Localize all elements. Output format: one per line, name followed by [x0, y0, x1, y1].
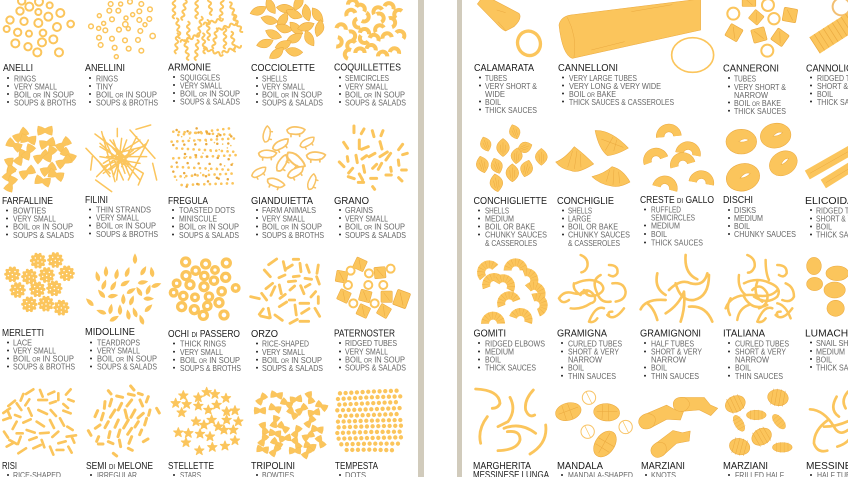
details: cannelloni: THICK SAUCES & CASSEROLES: [569, 98, 674, 107]
details: cocciolette: BOIL OR IN SOUP: [262, 91, 322, 100]
heading: conchiglie: CONCHIGLIE: [557, 196, 614, 207]
panel: gramignoni: [640, 255, 712, 381]
details: merletti: VERY SMALL: [13, 347, 56, 356]
heading: cannelloni: CANNELLONI: [558, 63, 618, 74]
details: coquillettes: VERY SMALL: [345, 82, 388, 92]
heading: midolline: MIDOLLINE: [85, 327, 135, 338]
details: coquillettes: [340, 74, 406, 108]
details: armonie: VERY SMALL: [180, 82, 222, 90]
details: grano: [340, 206, 406, 240]
heading: tempesta: TEMPESTA: [335, 461, 378, 472]
details: coquillettes: BOIL OR IN SOUP: [345, 91, 405, 100]
illustration: lumache snail shells: [807, 257, 848, 316]
heading: farfalline: FARFALLINE: [2, 196, 53, 207]
details: fregula: SOUPS & SALADS: [179, 231, 239, 240]
details: calamarata: WIDE: [485, 90, 505, 99]
details: fregula: BOIL OR IN SOUP: [179, 223, 239, 232]
details: conchiglie: LARGE: [568, 215, 591, 224]
panel: risi: [2, 389, 76, 477]
details: italiana: CURLED TUBES: [735, 340, 789, 348]
heading: creste di gallo: CRESTE DI GALLO: [640, 195, 714, 206]
panel: filini: [85, 125, 158, 239]
illustration: gianduietta farm animals: [250, 126, 325, 192]
details: fregula: TOASTED DOTS: [179, 206, 235, 215]
heading: mandala: MANDALA: [557, 461, 603, 472]
panel: armonie: [168, 0, 243, 107]
details: midolline: BOIL OR IN SOUP: [97, 355, 157, 364]
details: gianduietta: [257, 206, 324, 240]
details: conchiglie: SHELLS: [568, 207, 592, 216]
illustration: calamarata tube and ring: [477, 0, 544, 59]
details: ochi di passero: [174, 340, 241, 373]
details: anelli: VERY SMALL: [14, 82, 57, 92]
illustration: cannolicchi ridged tube: [815, 0, 848, 45]
details: cocciolette: [257, 74, 323, 108]
details: dischi: MEDIUM: [734, 214, 763, 223]
details: gianduietta: FARM ANIMALS: [262, 206, 316, 215]
details: gomiti: THICK SAUCES: [485, 364, 536, 373]
details: merletti: LACE: [13, 339, 32, 348]
details: creste di gallo: THICK SAUCES: [651, 238, 703, 248]
details: gomiti: [479, 340, 545, 373]
details: anellini: TINY: [96, 82, 113, 92]
illustration: grano grains: [339, 126, 407, 189]
details: italiana: NARROW: [735, 356, 769, 365]
details: filini: SOUPS & BROTHS: [96, 230, 158, 239]
details: canneroni: [729, 74, 786, 116]
details: farfalline: BOWTIES: [13, 207, 46, 216]
panel: dischi: [723, 121, 802, 239]
details: gomiti: BOIL: [485, 356, 501, 365]
heading: gomiti: GOMITI: [474, 328, 506, 340]
details: canneroni: BOIL OR BAKE: [734, 99, 781, 108]
details: conchiglie: CHUNKY SAUCES: [568, 231, 630, 240]
heading: margherita messinese lunga: MARGHERITA: [473, 461, 531, 472]
details: midolline: SOUPS & SALADS: [97, 363, 157, 372]
details: paternoster: BOIL OR IN SOUP: [345, 356, 405, 365]
panel: anelli: [3, 0, 76, 108]
details: orzo: RICE-SHAPED: [262, 340, 309, 349]
illustration: midolline teardrops: [84, 253, 162, 325]
panel: lumache: [805, 257, 848, 372]
panel: ochi di passero: [168, 258, 241, 373]
details: farfalline: BOIL OR IN SOUP: [13, 223, 73, 232]
illustration: marziani frilled shapes: [722, 387, 792, 458]
details: midolline: VERY SMALL: [97, 347, 140, 356]
heading: marziani: MARZIANI: [723, 461, 768, 472]
details: orzo: VERY SMALL: [262, 348, 305, 357]
details: italiana: BOIL: [735, 364, 751, 373]
heading: stellette: STELLETTE: [168, 461, 214, 472]
panel: italiana: [723, 255, 794, 381]
details: armonie: SQUIGGLES: [180, 74, 220, 82]
details: conchigliette: MEDIUM: [485, 215, 514, 224]
panel: fregula: [168, 128, 239, 240]
details: creste di gallo: SEMICIRCLES: [651, 214, 695, 223]
details: fregula: MINISCULE: [179, 214, 217, 224]
details: cannolicchi: BOIL: [817, 90, 833, 99]
panel: gomiti: [474, 261, 546, 373]
details: dischi: [729, 206, 796, 239]
details: filini: [90, 206, 158, 239]
details: creste di gallo: RUFFLED: [651, 206, 681, 215]
panel: marziani frilled: [722, 387, 792, 477]
illustration: anelli rings: [4, 0, 74, 56]
illustration: tempesta dots: [337, 391, 403, 450]
details: gramigna: NARROW: [568, 356, 602, 365]
illustration: filini thin strands: [86, 125, 157, 192]
panel: calamarata: [474, 0, 544, 115]
heading: calamarata: CALAMARATA: [474, 63, 534, 74]
illustration: paternoster ridged tubes: [335, 257, 411, 319]
details: grano: SOUPS & SALADS: [345, 231, 406, 240]
panel: elicoidali: [805, 148, 848, 240]
details: ochi di passero: THICK RINGS: [180, 340, 226, 349]
panel: paternoster: [334, 257, 411, 373]
details: ochi di passero: SOUPS & BROTHS: [180, 364, 241, 373]
heading: merletti: MERLETTI: [2, 328, 44, 339]
details: gomiti: RIDGED ELBOWS: [485, 340, 545, 348]
details: gramigna: CURLED TUBES: [568, 340, 622, 348]
details: cocciolette: SHELLS: [262, 74, 287, 84]
panel: coquillettes: [334, 0, 406, 108]
illustration: italiana curled tubes: [726, 255, 794, 322]
details: conchiglie: [563, 207, 630, 248]
details: italiana: THIN SAUCES: [735, 372, 783, 381]
panel: anellini: [85, 0, 158, 108]
details: calamarata: THICK SAUCES: [485, 106, 537, 115]
heading: gramigna: GRAMIGNA: [557, 328, 607, 340]
panel: mandala: [554, 391, 633, 477]
details: anellini: RINGS: [96, 74, 118, 84]
illustration: tripolini bowties: [254, 390, 329, 460]
illustration: fregula toasted dots: [172, 128, 238, 187]
details: gomiti: MEDIUM: [485, 348, 514, 357]
details: conchiglie: & CASSEROLES: [568, 239, 620, 248]
details: elicoidali: BOIL: [816, 222, 832, 232]
details: merletti: [8, 339, 75, 372]
details: conchigliette: & CASSEROLES: [485, 239, 537, 248]
illustration: mandala ovals and rings: [554, 391, 632, 461]
illustration: margherita messinese lunga strands: [476, 389, 546, 454]
details: merletti: BOIL OR IN SOUP: [13, 355, 74, 364]
details: filini: BOIL OR IN SOUP: [96, 222, 156, 231]
details: calamarata: [480, 74, 537, 115]
details: paternoster: RIDGED TUBES: [345, 339, 397, 348]
details: grano: GRAINS: [345, 206, 373, 215]
details: elicoidali: [811, 206, 848, 240]
details: gramignoni: SHORT & VERY: [651, 348, 702, 357]
illustration: farfalline bowties: [1, 126, 77, 193]
panel: canneroni: [723, 0, 798, 116]
details: italiana: SHORT & VERY: [735, 348, 786, 357]
details: conchigliette: BOIL OR BAKE: [485, 223, 535, 232]
panel: grano: [334, 126, 407, 240]
details: farfalline: [7, 207, 74, 240]
illustration: ochi di passero thick rings: [170, 258, 239, 319]
details: anellini: SOUPS & BROTHS: [96, 99, 158, 108]
details: anellini: [90, 74, 158, 108]
illustration: marziani knots: [637, 390, 720, 460]
heading: italiana: ITALIANA: [723, 328, 765, 340]
details: creste di gallo: [645, 206, 703, 248]
details: fregula: [173, 206, 239, 240]
details: lumache: BOIL: [816, 356, 832, 364]
panel: messinesi: [806, 392, 848, 477]
panel: left page background: [0, 0, 418, 477]
illustration: orzo rice shapes: [251, 259, 320, 323]
details: filini: VERY SMALL: [96, 214, 139, 223]
heading: filini: FILINI: [85, 195, 108, 206]
illustration: gramignoni half tubes: [641, 255, 712, 322]
details: gianduietta: BOIL OR IN SOUP: [262, 223, 322, 232]
details: grano: BOIL OR IN SOUP: [345, 223, 405, 232]
panel: stellette: [168, 387, 243, 477]
details: gramigna: THIN SAUCES: [568, 372, 616, 381]
details: anelli: BOIL OR IN SOUP: [14, 91, 74, 100]
illustration: anellini rings: [89, 0, 155, 59]
details: gramignoni: HALF TUBES: [651, 340, 694, 348]
illustration: creste di gallo ruffled semicircles: [645, 127, 711, 191]
details: conchiglie: BOIL OR BAKE: [568, 223, 618, 232]
panel: gramigna: [557, 255, 626, 381]
details: cannelloni: VERY LARGE TUBES: [569, 74, 637, 83]
details: gianduietta: SOUPS & BROTHS: [262, 231, 324, 240]
details: cannelloni: VERY LONG & VERY WIDE: [569, 82, 661, 91]
details: cannolicchi: [811, 74, 848, 107]
details: anelli: RINGS: [14, 74, 36, 84]
details: calamarata: TUBES: [485, 74, 507, 83]
details: creste di gallo: BOIL: [651, 230, 667, 239]
details: midolline: [91, 339, 157, 372]
illustration: risi rice shapes: [3, 389, 76, 455]
heading: ochi di passero: OCHI DI PASSERO: [168, 329, 240, 340]
illustration: armonie squiggles: [173, 0, 243, 60]
panel: gianduietta: [250, 126, 325, 240]
details: cocciolette: SOUPS & SALADS: [262, 99, 323, 108]
heading: tripolini: TRIPOLINI: [251, 461, 295, 472]
heading: gramignoni: GRAMIGNONI: [640, 328, 701, 340]
details: farfalline: VERY SMALL: [13, 215, 56, 224]
divider: right page edge: [457, 0, 462, 477]
details: paternoster: SOUPS & SALADS: [345, 364, 406, 373]
heading: risi: RISI: [2, 461, 17, 472]
details: ochi di passero: BOIL OR IN SOUP: [180, 356, 240, 365]
details: canneroni: THICK SAUCES: [734, 107, 786, 116]
panel: margherita messinese lunga: [473, 389, 549, 477]
illustration: dischi disks: [723, 121, 802, 195]
details: paternoster: [340, 339, 406, 373]
panel: cannolicchi: [806, 0, 848, 107]
heading: dischi: DISCHI: [723, 195, 753, 206]
heading: cocciolette: COCCIOLETTE: [251, 63, 315, 74]
heading: anellini: ANELLINI: [85, 63, 125, 74]
details: filini: THIN STRANDS: [96, 206, 151, 214]
heading: conchigliette: CONCHIGLIETTE: [474, 196, 547, 207]
heading: canneroni: CANNERONI: [723, 64, 779, 74]
details: conchigliette: SHELLS: [485, 207, 509, 216]
details: armonie: BOIL OR IN SOUP: [180, 90, 240, 99]
details: orzo: BOIL OR IN SOUP: [262, 356, 322, 365]
details: orzo: [257, 340, 323, 373]
illustration: stellette stars: [171, 387, 243, 455]
heading: armonie: ARMONIE: [168, 62, 211, 74]
details: canneroni: VERY SHORT &: [734, 83, 786, 92]
details: gramigna: SHORT & VERY: [568, 348, 619, 357]
details: anelli: [8, 74, 76, 108]
details: coquillettes: SEMICIRCLES: [345, 74, 389, 83]
panel: semi di melone: [86, 386, 159, 477]
panel: conchiglie: [556, 129, 631, 248]
details: lumache: [811, 339, 848, 372]
panel: orzo: [251, 259, 323, 373]
details: cocciolette: VERY SMALL: [262, 82, 305, 92]
details: calamarata: VERY SHORT &: [485, 82, 537, 91]
details: gramignoni: [645, 340, 702, 381]
details: calamarata: BOIL: [485, 98, 501, 107]
panel: tripolini: [251, 390, 329, 477]
details: ochi di passero: VERY SMALL: [180, 348, 223, 357]
details: midolline: TEARDROPS: [97, 339, 140, 348]
illustration: cannelloni large tube and ring: [559, 0, 714, 72]
details: gramigna: BOIL: [568, 364, 584, 373]
heading: gianduietta: GIANDUIETTA: [251, 196, 313, 207]
details: italiana: [729, 340, 789, 381]
details: dischi: CHUNKY SAUCES: [734, 230, 796, 239]
divider: left page edge: [418, 0, 424, 477]
details: anelli: SOUPS & BROTHS: [14, 99, 76, 108]
details: canneroni: TUBES: [734, 74, 756, 84]
panel: merletti: [2, 253, 75, 372]
panel: marziani knots: [637, 390, 720, 477]
illustration: canneroni tubes and rings: [725, 0, 798, 57]
panel: tempesta: [335, 391, 403, 477]
illustration: semi di melone irregular seeds: [88, 386, 159, 456]
panel: cocciolette: [249, 0, 326, 108]
panel: midolline: [84, 253, 162, 372]
illustration: elicoidali ridged tubes: [807, 148, 848, 184]
panel: farfalline: [1, 126, 77, 240]
illustration: gomiti ridged elbows: [478, 261, 546, 324]
details: orzo: SOUPS & SALADS: [262, 364, 323, 373]
heading: coquillettes: COQUILLETTES: [334, 62, 401, 74]
details: gramignoni: THIN SAUCES: [651, 372, 699, 381]
heading: marziani: MARZIANI: [641, 461, 685, 472]
illustration: coquillettes semicircles: [336, 0, 406, 59]
details: conchigliette: CHUNKY SAUCES: [485, 231, 547, 240]
details: merletti: SOUPS & BROTHS: [13, 363, 75, 372]
details: armonie: [174, 74, 240, 107]
details: gramigna: [562, 340, 622, 381]
details: gramignoni: NARROW: [651, 356, 686, 365]
details: cannelloni: [563, 74, 674, 107]
details: cannelloni: BOIL OR BAKE: [569, 90, 616, 99]
illustration: conchigliette shells: [474, 123, 547, 193]
details: grano: VERY SMALL: [345, 214, 388, 224]
details: paternoster: VERY SMALL: [345, 348, 388, 357]
details: creste di gallo: MEDIUM: [651, 222, 680, 231]
heading: paternoster: PATERNOSTER: [334, 328, 395, 340]
heading: semi di melone: SEMI DI MELONE: [86, 461, 153, 472]
heading: margherita messinese lunga: [473, 461, 549, 477]
heading: fregula: FREGULA: [168, 196, 208, 207]
illustration: merletti lace flowers: [6, 253, 73, 314]
details: gianduietta: VERY SMALL: [262, 214, 305, 224]
heading: orzo: ORZO: [251, 329, 278, 340]
heading: grano: GRANO: [334, 196, 369, 207]
details: dischi: DISKS: [734, 206, 756, 215]
details: canneroni: NARROW: [734, 91, 768, 100]
details: dischi: BOIL: [734, 222, 750, 231]
details: armonie: SOUPS & SALADS: [180, 98, 240, 107]
illustration: messinesi half tubes: [810, 392, 848, 451]
illustration: conchiglie large shells: [556, 129, 631, 186]
details: coquillettes: SOUPS & SALADS: [345, 99, 406, 108]
panel: creste di gallo: [640, 127, 714, 248]
details: gramignoni: BOIL: [651, 364, 667, 373]
illustration: cocciolette shells: [249, 0, 326, 62]
details: conchigliette: [479, 207, 547, 248]
illustration: gramigna curled tubes: [559, 255, 626, 322]
panel: conchigliette: [474, 123, 547, 248]
panel: cannelloni: [558, 0, 714, 107]
details: anellini: BOIL OR IN SOUP: [96, 91, 157, 100]
details: farfalline: SOUPS & SALADS: [13, 231, 74, 240]
heading: anelli: ANELLI: [3, 63, 33, 74]
